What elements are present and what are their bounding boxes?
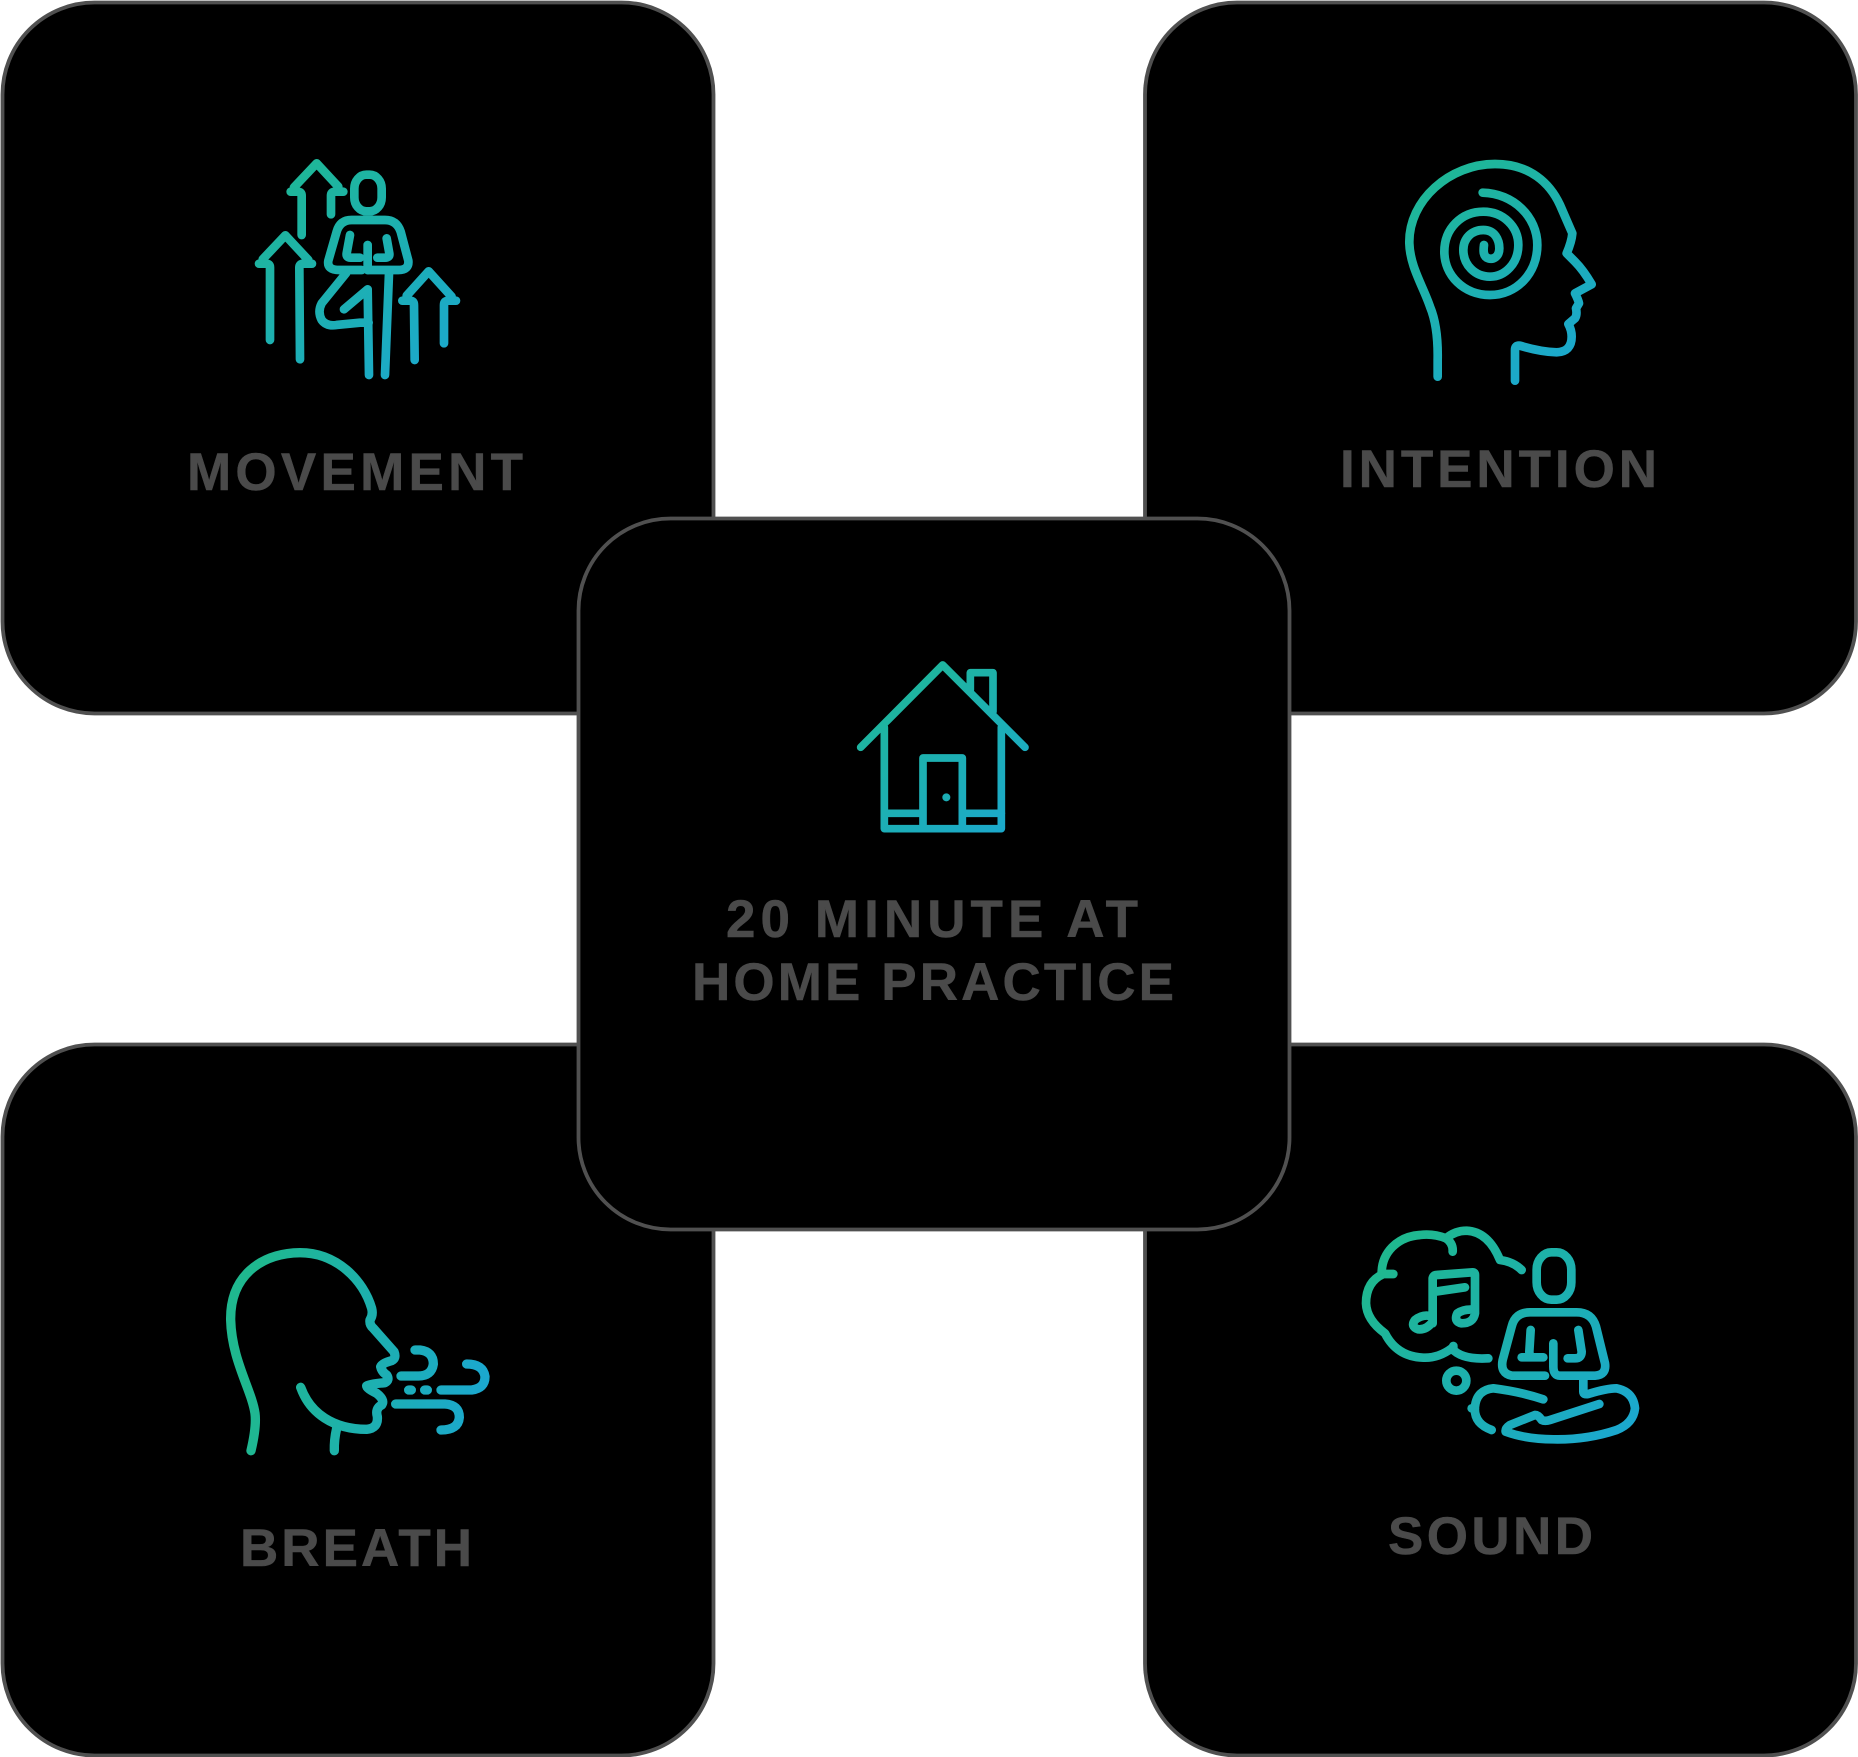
card: breath background <box>2 1044 714 1756</box>
label: breath: BREATH <box>240 1519 472 1578</box>
card: sound background <box>1145 1044 1856 1756</box>
label: intention: INTENTION <box>1340 440 1657 499</box>
panel: movement <box>2 2 714 714</box>
label: 20 minute at home practice: HOME PRACTICE <box>692 953 1174 1012</box>
icon: house <box>861 665 1025 829</box>
label: 20 minute at home practice <box>692 890 1174 1012</box>
label: 20 minute at home practice: 20 MINUTE AT <box>726 890 1138 949</box>
panel: intention <box>1145 2 1856 714</box>
panel: breath <box>2 1044 714 1756</box>
icon: person in tree pose with rising arrows <box>259 163 456 375</box>
card: intention background <box>1145 2 1856 714</box>
label: movement: MOVEMENT <box>187 443 523 502</box>
icon: head exhaling air <box>231 1253 485 1451</box>
label: sound: SOUND <box>1388 1507 1593 1566</box>
panel: sound <box>1145 1044 1856 1756</box>
card: center background <box>578 518 1290 1230</box>
icon: seated person thinking of music <box>1366 1231 1635 1439</box>
card: movement background <box>2 2 714 714</box>
icon: head with spiral <box>1409 164 1592 381</box>
panel: center home practice <box>578 518 1290 1230</box>
